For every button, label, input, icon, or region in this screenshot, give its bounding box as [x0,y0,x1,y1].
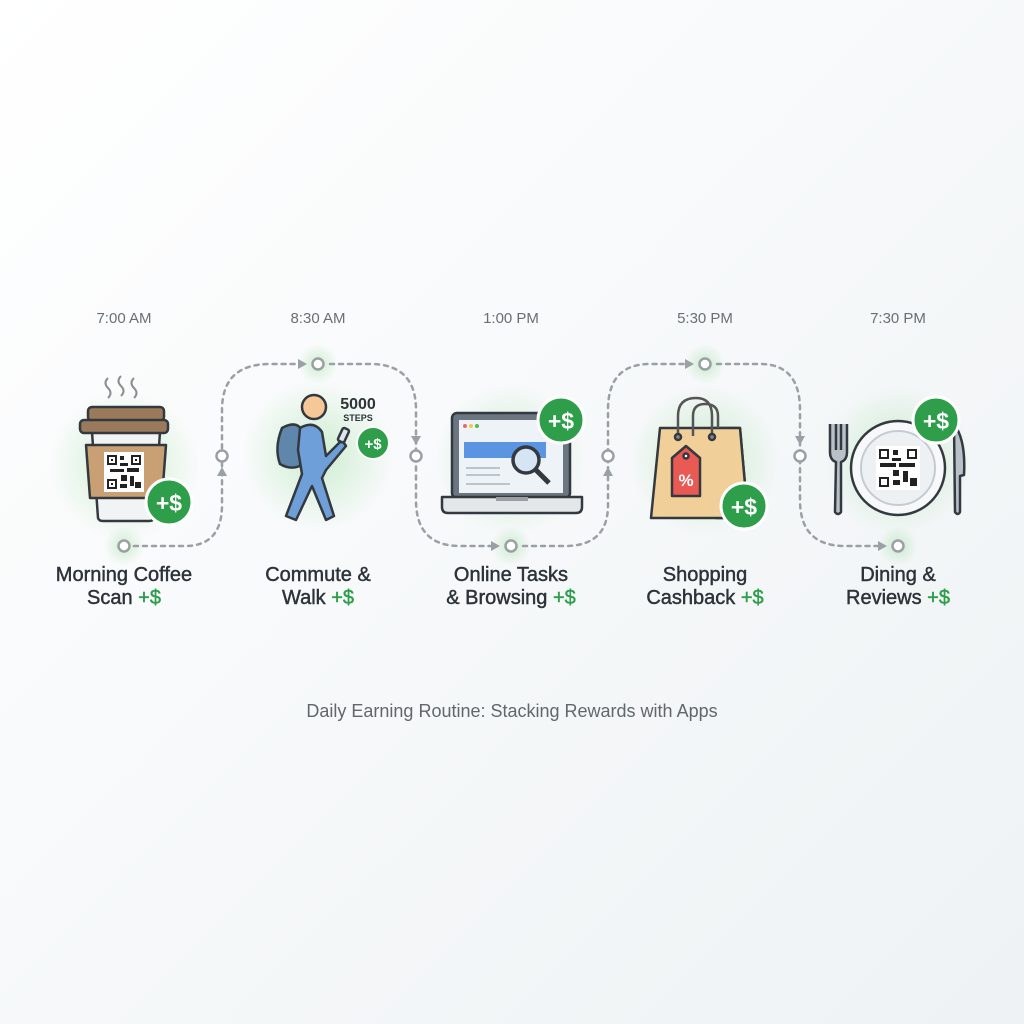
step labels: Walk +$ [282,587,354,609]
badge: dining +$ [913,397,959,443]
step labels: Shopping [663,564,747,586]
step labels: Morning Coffee [56,564,192,586]
badge: dining +$: +$ [923,408,949,434]
time labels: 1:00 PM [483,310,539,327]
step labels: Scan +$ [87,587,161,609]
caption: Daily Earning Routine: Stacking Rewards with Apps [306,701,718,721]
badge: walk +$ [357,427,389,459]
icon: walking person [277,395,350,520]
time labels: 7:30 PM [870,310,926,327]
steps counter [340,396,376,423]
badge: shopping +$ [721,483,767,529]
icon: shopping bag: % [678,471,694,490]
badge: coffee +$ [146,479,192,525]
badge: walk +$: +$ [364,436,382,453]
steps counter: STEPS [343,413,373,423]
icon: shopping bag [651,398,748,518]
step labels [56,564,950,609]
icon: plate with cutlery [830,421,964,515]
time labels: 8:30 AM [290,310,346,327]
dashed timeline path [134,364,884,546]
step labels: Cashback +$ [646,587,764,609]
badge: shopping +$: +$ [731,494,757,520]
step labels: Dining & [860,564,936,586]
arrowheads [217,359,887,551]
steps counter: 5000 [340,396,376,413]
icon: coffee cup [80,376,168,521]
step labels: & Browsing +$ [446,587,576,609]
time labels: 5:30 PM [677,310,733,327]
badge: laptop +$: +$ [548,408,574,434]
time labels: 7:00 AM [96,310,152,327]
step labels: Reviews +$ [846,587,950,609]
step labels: Online Tasks [454,564,568,586]
time labels [96,310,926,327]
badge: coffee +$: +$ [156,490,182,516]
step labels: Commute & [265,564,371,586]
timeline nodes [118,358,904,552]
icon: laptop [442,413,582,513]
background glows [49,344,973,566]
badge: laptop +$ [538,397,584,443]
